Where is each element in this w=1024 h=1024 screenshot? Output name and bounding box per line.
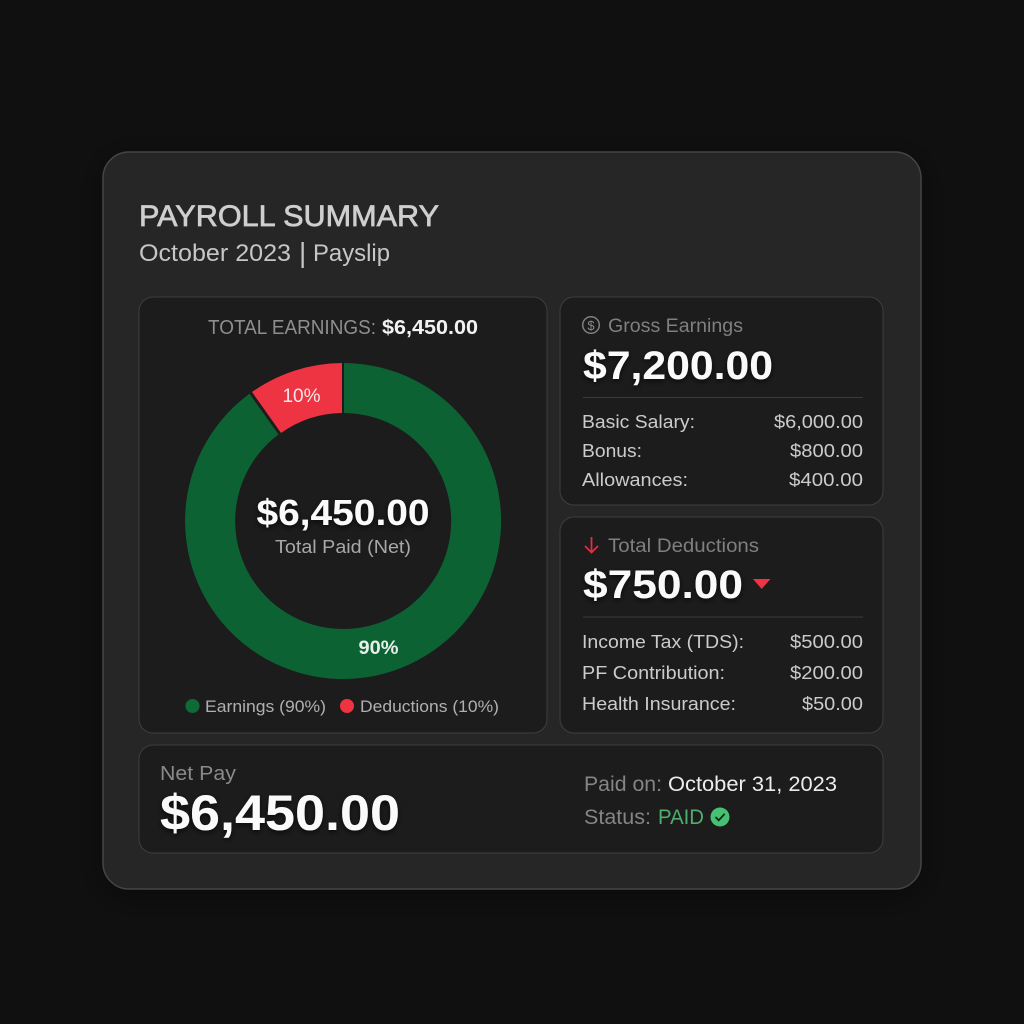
earnings rows: Allowances: [582, 469, 688, 490]
total deductions label: Total Deductions [608, 536, 759, 557]
payment status: PAID [658, 806, 704, 829]
legend [186, 697, 499, 716]
gross earnings amount: $7,200.00 [583, 344, 773, 388]
payment status: Status: [584, 806, 651, 829]
earnings rows: $400.00 [789, 469, 863, 490]
subtitle: | [299, 237, 306, 268]
earnings rows: $800.00 [790, 440, 863, 461]
net pay amount: $6,450.00 [160, 785, 400, 841]
paid date: October 31, 2023 [668, 773, 837, 796]
main card [103, 152, 921, 889]
panel: net pay [139, 745, 883, 853]
panel: gross earnings [560, 297, 883, 505]
donut chart: Total Paid (Net) [275, 537, 411, 557]
total earnings heading: TOTAL EARNINGS: [208, 317, 376, 339]
panel: donut chart [139, 297, 547, 733]
panel: total deductions [560, 517, 883, 733]
net pay label: Net Pay [160, 763, 236, 785]
deduction rows: $200.00 [790, 662, 863, 683]
subtitle: Payslip [313, 240, 390, 267]
icon: down arrow [585, 537, 598, 552]
donut chart: 10% [282, 386, 321, 407]
title: PAYROLL SUMMARY [139, 200, 439, 233]
deduction rows: PF Contribution: [582, 662, 725, 683]
deductions amount: $750.00 [583, 563, 743, 607]
paid date: Paid on: [584, 773, 662, 796]
deduction rows: Income Tax (TDS): [582, 631, 744, 652]
earnings rows: Bonus: [582, 440, 642, 461]
deduction rows: $500.00 [790, 631, 863, 652]
subtitle [139, 237, 390, 268]
icon: red triangle [753, 579, 770, 589]
earnings rows: Basic Salary: [582, 411, 695, 432]
icon: check badge [710, 808, 730, 826]
earnings rows [582, 411, 863, 490]
donut chart: 90% [358, 638, 399, 659]
total earnings heading: $6,450.00 [382, 317, 478, 339]
subtitle: October 2023 [139, 240, 291, 267]
legend: Deductions (10%) [360, 697, 499, 716]
icon: dollar coin [583, 317, 599, 333]
deduction rows: Health Insurance: [582, 693, 736, 714]
total earnings heading [208, 317, 478, 339]
donut chart: $6,450.00 [256, 492, 430, 533]
legend: Earnings (90%) [205, 697, 326, 716]
icon: dollar coin: $ [587, 318, 595, 333]
payment status [584, 806, 730, 829]
deduction rows: $50.00 [802, 693, 863, 714]
paid date [584, 773, 837, 796]
gross earnings label: Gross Earnings [608, 316, 743, 337]
deduction rows [582, 631, 863, 714]
donut chart [185, 363, 501, 679]
earnings rows: $6,000.00 [774, 411, 863, 432]
